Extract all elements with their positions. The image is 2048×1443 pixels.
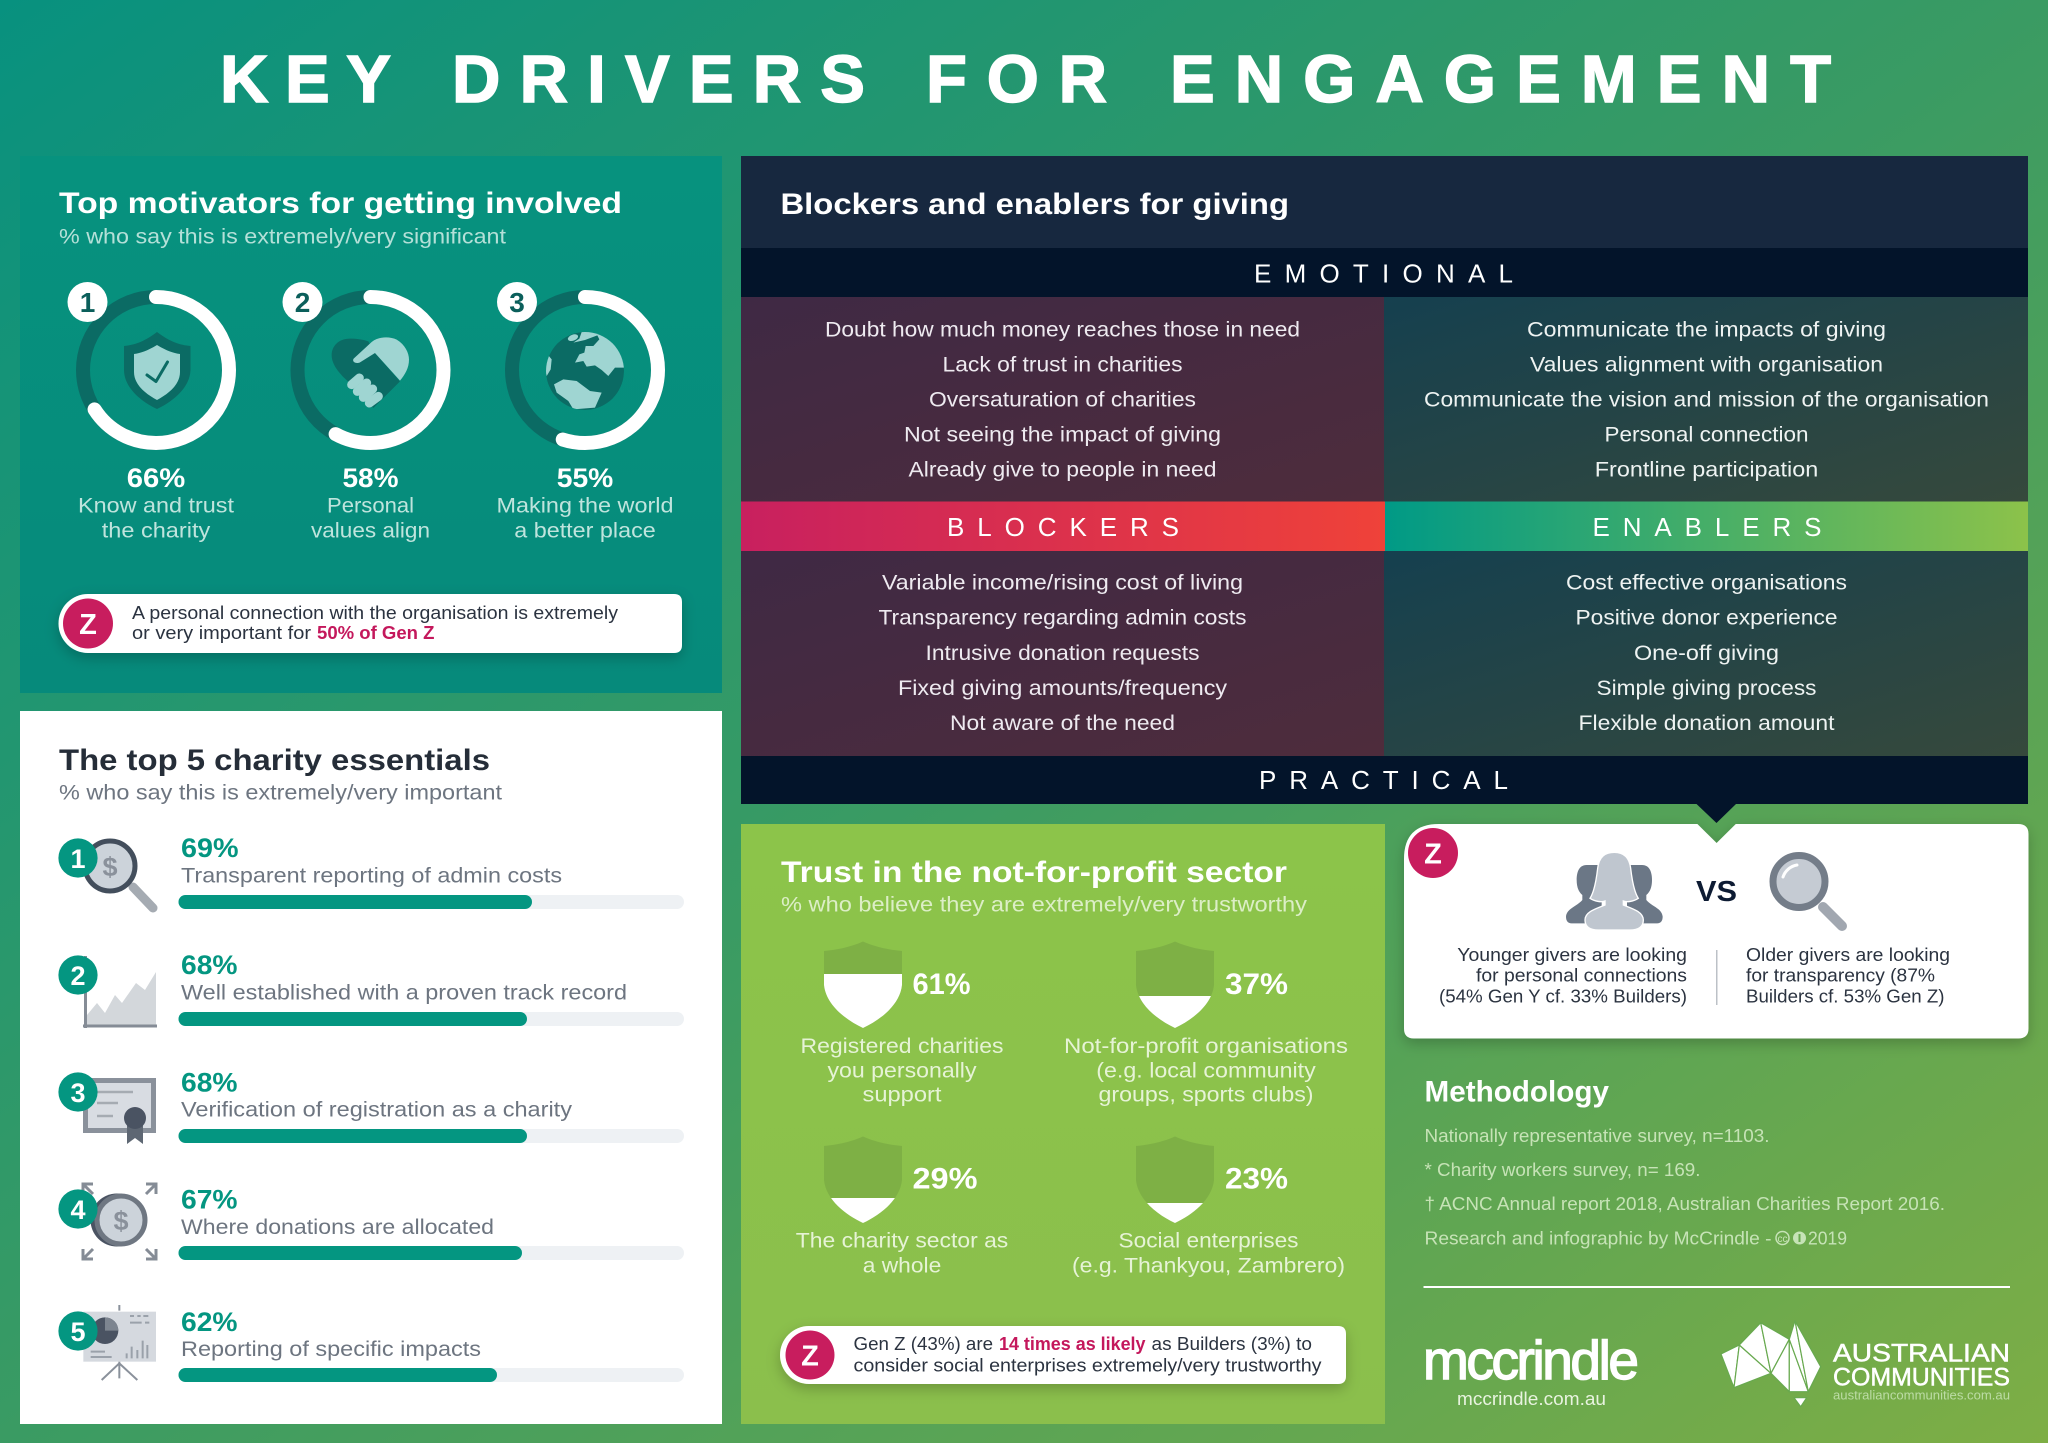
- quadrant: practical blockers: Transparency regarding admin costs: [878, 606, 1246, 630]
- row 4: where donations are allocated: 67%: [181, 1184, 238, 1214]
- stat: 61% registered charities: you personally: [828, 1060, 977, 1082]
- stat: 37% not-for-profit: 37%: [1225, 968, 1288, 1001]
- quadrant: emotional enablers: Communicate the impacts of giving: [1527, 318, 1886, 342]
- badge 3: 3: [70, 1078, 86, 1108]
- callout: gen Z 14 times as likely: 14 times as likely: [999, 1334, 1146, 1354]
- icon: people group: [1566, 852, 1663, 930]
- stat: 55%: 55%: [557, 463, 613, 493]
- practical bar: PRACTICAL: [1259, 765, 1508, 795]
- quadrant: emotional enablers: Values alignment with organisation: [1530, 354, 1883, 376]
- row 2: well established: [178, 950, 684, 1026]
- callout: gen Z 14 times as likely: consider social enterprises extremely/very trustworthy: [854, 1356, 1322, 1376]
- donut: 66% know and trust: 1: [80, 287, 95, 318]
- emotional bar: EMOTIONAL: [1254, 258, 1513, 288]
- methodology notes: Research and infographic by McCrindle -: [1424, 1228, 1772, 1248]
- quadrant: practical enablers: Cost effective organisations: [1566, 572, 1847, 594]
- quadrant: practical enablers: [1384, 551, 2028, 756]
- title: KEY: [220, 42, 391, 117]
- icon: certificate: [86, 1080, 154, 1144]
- stat: 66%: the charity: [102, 520, 211, 542]
- quadrant: practical blockers: Variable income/rising cost of living: [882, 572, 1243, 594]
- callout: gen Z personal connection: [58, 594, 682, 653]
- callout: gen Z 14 times as likely: Gen Z (43%) are: [854, 1334, 993, 1354]
- stat: 23% social enterprises: Social enterprises: [1118, 1230, 1298, 1252]
- badge 2: 2: [70, 961, 86, 991]
- logo mark: australia map: [1721, 1321, 1821, 1407]
- badge 4: [58, 1189, 98, 1229]
- shield gauge: 61%: [824, 942, 902, 1028]
- quadrant: emotional enablers: Communicate the vision and mission of the organisation: [1424, 388, 1989, 412]
- text: older givers: for transparency (87%: [1746, 964, 1935, 986]
- stat: 66%: [78, 463, 234, 542]
- enablers bar: [1385, 502, 2028, 551]
- logo wordmark: [1833, 1340, 2010, 1392]
- methodology: [1424, 1076, 1945, 1248]
- essentials heading: The top 5 charity essentials: [59, 744, 490, 777]
- panel: trust in the not-for-profit sector: [741, 824, 1385, 1424]
- row 2: well established: Well established with a proven track record: [181, 982, 627, 1004]
- shield gauge: 29%: [824, 1136, 902, 1223]
- logo: australian communities: [1721, 1321, 2010, 1407]
- badge: Z: Z: [1424, 838, 1442, 870]
- trust background: [741, 824, 1385, 1424]
- quadrant: practical blockers: Intrusive donation requests: [926, 642, 1200, 665]
- motivators heading: Top motivators for getting involved: [59, 187, 622, 220]
- icon: presentation board: [83, 1305, 156, 1380]
- text: younger givers: (54% Gen Y cf. 33% Builders): [1439, 986, 1687, 1006]
- badge 1: [58, 838, 98, 878]
- stat: 37% not-for-profit: [1064, 968, 1348, 1106]
- row 4: where donations are allocated: Where donations are allocated: [181, 1216, 494, 1239]
- callout: gen Z personal connection: or very important for: [132, 623, 311, 643]
- shield gauge: 37%: [1136, 942, 1214, 1028]
- icon: globe: [544, 330, 625, 410]
- quadrant: practical blockers: Not aware of the need: [950, 712, 1175, 735]
- quadrant: emotional enablers: Personal connection: [1604, 424, 1808, 446]
- enablers bar: ENABLERS: [1592, 512, 1822, 542]
- badge 3: [58, 1072, 98, 1112]
- row 3: verification: [178, 1068, 684, 1143]
- quadrant: emotional enablers: Frontline participation: [1595, 458, 1818, 482]
- blockers heading bar: [741, 156, 2028, 248]
- callout: gen Z personal connection: Z: [79, 609, 97, 641]
- footer rule: [1424, 1286, 2010, 1288]
- icon: coin with arrows: [83, 1184, 156, 1259]
- row 5: reporting of specific impacts: [178, 1307, 684, 1382]
- arrow: pointer to comparison: [1696, 804, 1736, 823]
- stat: 66%: 66%: [127, 463, 185, 493]
- stat: 55%: a better place: [514, 520, 656, 542]
- quadrant: emotional blockers: Already give to people in need: [908, 458, 1216, 482]
- callout: gen Z 14 times as likely: as Builders (3%) to: [1152, 1334, 1312, 1354]
- quadrant: emotional blockers: Lack of trust in charities: [942, 354, 1182, 376]
- emotional bar: [741, 248, 2028, 297]
- trust subtitle: % who believe they are extremely/very trustworthy: [781, 894, 1308, 916]
- icon: magnifier with dollar: [85, 841, 153, 908]
- quadrant: practical enablers: Simple giving process: [1596, 677, 1816, 700]
- stat: 29% charity sector: 29%: [912, 1162, 978, 1196]
- stat: 61% registered charities: 61%: [912, 968, 970, 1001]
- row 4: where donations are allocated: [178, 1184, 684, 1260]
- panel: top motivators: [20, 156, 722, 693]
- methodology notes: cc: [1778, 1234, 1788, 1245]
- quadrant: practical enablers: Flexible donation amount: [1578, 712, 1835, 735]
- stat: 23% social enterprises: 23%: [1225, 1162, 1288, 1196]
- stat: 61% registered charities: Registered charities: [800, 1035, 1004, 1058]
- motivators background: [20, 156, 722, 693]
- text: older givers: Builders cf. 53% Gen Z): [1746, 986, 1944, 1006]
- divider: [1716, 950, 1718, 1005]
- row 1: transparent reporting: 69%: [181, 833, 238, 863]
- quadrant: emotional blockers: [741, 297, 1384, 502]
- row 5: reporting of specific impacts: Reporting of specific impacts: [181, 1338, 481, 1361]
- blockers bar: [741, 502, 1385, 551]
- methodology notes: † ACNC Annual report 2018, Australian Charities Report 2016.: [1424, 1194, 1945, 1214]
- quadrant: practical blockers: [741, 551, 1384, 756]
- logo web address: australiancommunities.com.au: [1833, 1388, 2010, 1402]
- quadrant: emotional blockers: Oversaturation of charities: [929, 388, 1196, 412]
- blockers heading: Blockers and enablers for giving: [780, 188, 1289, 221]
- callout: gen Z personal connection: 50% of Gen Z: [317, 623, 434, 643]
- donut: 55% making the world: 3: [509, 287, 525, 318]
- methodology notes: Nationally representative survey, n=1103.: [1424, 1126, 1770, 1146]
- icon: magnifier with dollar: $: [102, 852, 118, 882]
- stat: 55%: [496, 463, 674, 542]
- badge 1: 1: [70, 844, 86, 874]
- callout: gen Z 14 times as likely: Z: [801, 1340, 819, 1372]
- title: [220, 42, 1831, 117]
- icon: coin with arrows: $: [113, 1206, 129, 1236]
- stat: 58%: [311, 463, 430, 542]
- text: VS: VS: [1696, 876, 1737, 908]
- logo: mccrindle: mccrindle.com.au: [1457, 1389, 1606, 1409]
- panel: blockers and enablers: [741, 156, 2028, 823]
- stat: 29% charity sector: [796, 1162, 1008, 1278]
- stat: 29% charity sector: The charity sector as: [796, 1230, 1008, 1252]
- callout: gen Z 14 times as likely: [780, 1326, 1346, 1384]
- panel: younger vs older comparison: [1404, 824, 2028, 1038]
- row 5: reporting of specific impacts: 62%: [181, 1307, 238, 1337]
- logo: mccrindle: mccrindle: [1423, 1329, 1639, 1391]
- essentials subtitle: % who say this is extremely/very important: [59, 782, 502, 804]
- donut: 58% values: [282, 282, 444, 443]
- badge 4: 4: [70, 1195, 86, 1225]
- practical bar: [741, 756, 2028, 804]
- logo wordmark: COMMUNITIES: [1833, 1364, 2010, 1392]
- title: ENGAGEMENT: [1170, 42, 1831, 117]
- row 3: verification: Verification of registration as a charity: [181, 1098, 573, 1122]
- quadrant: emotional blockers: Not seeing the impact of giving: [904, 424, 1221, 446]
- stat: 23% social enterprises: (e.g. Thankyou, Zambrero): [1072, 1254, 1345, 1278]
- badge 5: [58, 1311, 98, 1351]
- stat: 37% not-for-profit: Not-for-profit organisations: [1064, 1035, 1348, 1058]
- badge 5: 5: [70, 1317, 86, 1347]
- stat: 61% registered charities: [800, 968, 1004, 1106]
- callout: gen Z personal connection: A personal connection with the organisation is extremely: [132, 603, 618, 623]
- quadrant: emotional enablers: [1384, 297, 2028, 502]
- methodology notes: * Charity workers survey, n= 169.: [1424, 1160, 1700, 1180]
- text: younger givers: Younger givers are looking: [1457, 944, 1687, 965]
- row 1: transparent reporting: [178, 833, 684, 909]
- text: older givers: [1746, 944, 1950, 1006]
- row 3: verification: 68%: [181, 1068, 238, 1098]
- donut: 66% know and trust: [68, 282, 229, 443]
- stat: 37% not-for-profit: groups, sports clubs): [1098, 1084, 1314, 1106]
- text: younger givers: [1439, 944, 1687, 1006]
- quadrant: practical enablers: Positive donor experience: [1576, 606, 1838, 630]
- icon: area chart: [83, 956, 157, 1028]
- row 1: transparent reporting: Transparent reporting of admin costs: [181, 864, 562, 888]
- stat: 58%: Personal: [327, 494, 414, 518]
- icon: magnifier: [1773, 856, 1842, 926]
- stat: 37% not-for-profit: (e.g. local community: [1096, 1060, 1316, 1082]
- icon: shield: [124, 332, 190, 409]
- quadrant: practical blockers: Fixed giving amounts/frequency: [898, 677, 1228, 700]
- quadrant: emotional blockers: Doubt how much money reaches those in need: [825, 318, 1300, 342]
- motivators subtitle: % who say this is extremely/very significant: [59, 226, 506, 248]
- shield gauge: 23%: [1136, 1136, 1214, 1223]
- donut: 55% making the world: [497, 282, 658, 443]
- row 2: well established: 68%: [181, 950, 238, 980]
- text: older givers: Older givers are looking: [1746, 944, 1950, 965]
- icon: handshake heart: [332, 337, 409, 408]
- essentials background: [20, 711, 722, 1424]
- methodology notes: 2019: [1808, 1228, 1847, 1248]
- stat: 55%: Making the world: [496, 494, 674, 518]
- text: younger givers: for personal connections: [1476, 964, 1687, 986]
- stat: 29% charity sector: a whole: [863, 1254, 941, 1278]
- stat: 61% registered charities: support: [862, 1084, 942, 1106]
- panel: top 5 charity essentials: [20, 711, 722, 1424]
- logo wordmark: AUSTRALIAN: [1833, 1340, 2010, 1368]
- quadrant: practical enablers: One-off giving: [1634, 642, 1779, 665]
- stat: 58%: 58%: [342, 463, 398, 493]
- comparison card: [1404, 824, 2028, 1038]
- badge: Z: [1408, 828, 1458, 878]
- trust heading: Trust in the not-for-profit sector: [781, 856, 1287, 889]
- title: FOR: [926, 42, 1107, 117]
- methodology heading: Methodology: [1424, 1076, 1609, 1108]
- badge 2: [58, 955, 98, 995]
- methodology notes: [1424, 1126, 1945, 1248]
- donut: 58% values: 2: [295, 287, 310, 318]
- blockers bar: BLOCKERS: [947, 512, 1179, 542]
- stat: 23% social enterprises: [1072, 1162, 1345, 1278]
- stat: 66%: Know and trust: [78, 494, 234, 518]
- stat: 58%: values align: [311, 520, 430, 542]
- title: DRIVERS: [452, 42, 865, 117]
